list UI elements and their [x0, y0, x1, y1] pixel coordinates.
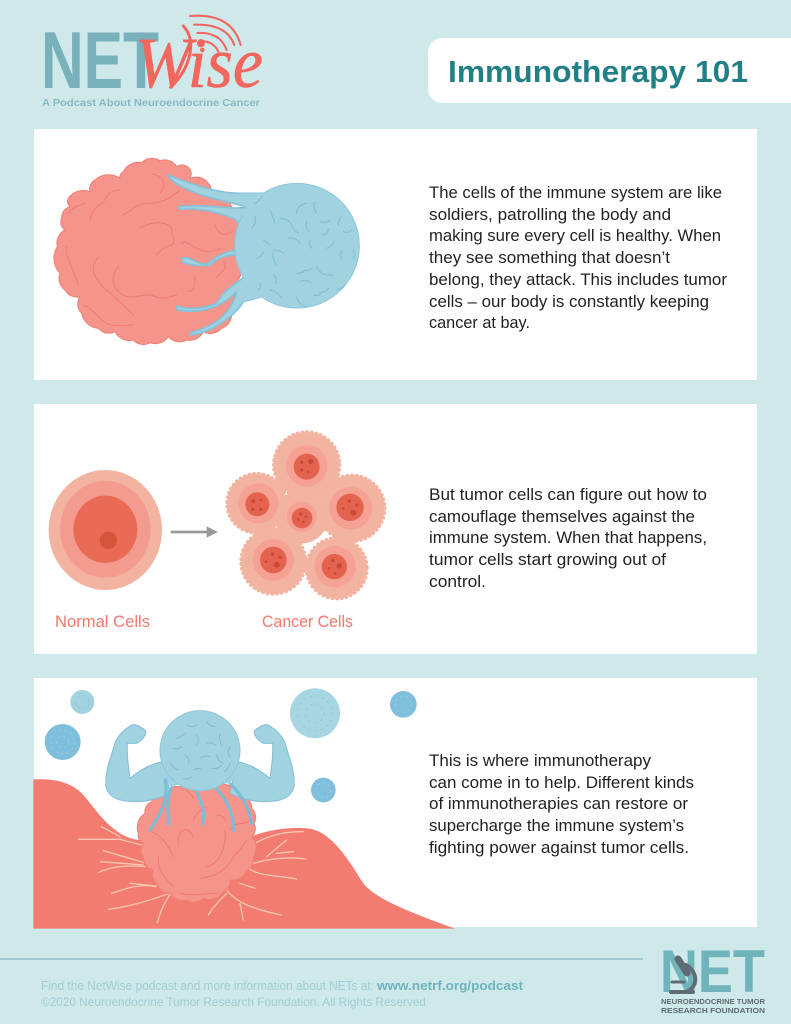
footer: [0, 938, 766, 1015]
logo wordmark NET: NET: [41, 16, 159, 106]
text: immune system soldiers: belong, they attack. This includes tumor: [429, 270, 727, 289]
logo: NETWise podcast: [41, 16, 263, 109]
text: immune system soldiers: they see something that doesn’t: [429, 248, 670, 267]
logo caption line 2: RESEARCH FOUNDATION: [661, 1006, 765, 1015]
text: immune system soldiers: [429, 183, 727, 332]
immune cell with tendrils: [168, 175, 359, 335]
text: how immunotherapy helps: supercharge the immune system’s: [429, 816, 684, 835]
icon: broadcast signal: [171, 16, 241, 87]
text: immune system soldiers: The cells of the immune system are like: [429, 183, 722, 202]
label: normal cells: Normal Cells: [55, 612, 150, 631]
footer url: www.netrf.org/podcast: [376, 979, 524, 993]
tumor: [137, 784, 256, 902]
text: immune system soldiers: soldiers, patrolling the body and: [429, 205, 671, 224]
tumor wrinkles: [148, 790, 250, 895]
logo: Neuroendocrine Tumor Research Foundation: NET: [660, 938, 765, 1005]
footer link line: Find the NetWise podcast and more information about NETs at:: [41, 979, 374, 993]
panel: immunotherapy supercharges immune cell: [33, 678, 757, 929]
arrow: [171, 526, 218, 538]
logo tagline: A Podcast About Neuroendocrine Cancer: [42, 97, 260, 109]
tumor wrinkles: [66, 174, 232, 326]
text: how immunotherapy helps: This is where immunotherapy: [429, 751, 651, 770]
free immune cells: [45, 688, 417, 802]
illustration: immune cell grabbing tumor cell: [54, 158, 359, 344]
immune cell texture: [170, 722, 230, 779]
text: how immunotherapy helps: [429, 751, 694, 857]
tendrils: [149, 768, 252, 831]
panel: normal versus cancer cells: [34, 404, 757, 654]
icon: microscope: [671, 959, 695, 992]
text: how immunotherapy helps: fighting power against tumor cells.: [429, 838, 689, 857]
illustration: strong immune cell on tumor: [33, 688, 455, 929]
text: tumor camouflage: [429, 485, 707, 591]
copyright: ©2020 Neuroendocrine Tumor Research Foundation. All Rights Reserved: [41, 995, 426, 1009]
tissue veins: [78, 827, 306, 923]
text: immune system soldiers: cells – our body is constantly keeping: [429, 292, 709, 311]
immune cell surface texture: [252, 197, 354, 307]
illustration: cell comparison: [49, 432, 384, 598]
text: immune system soldiers: cancer at bay.: [429, 313, 530, 332]
cancer cell cluster: [227, 432, 384, 598]
text: how immunotherapy helps: of immunotherapies can restore or: [429, 794, 688, 813]
logo caption line 1: NEUROENDOCRINE TUMOR: [661, 997, 766, 1006]
tumor cell: [54, 158, 245, 344]
flexed arms: [106, 725, 294, 802]
label: cancer cells: Cancer Cells: [262, 612, 353, 631]
text: tumor camouflage: But tumor cells can figure out how to: [429, 485, 707, 504]
left arm: [106, 725, 170, 802]
text: tumor camouflage: control.: [429, 572, 486, 591]
tissue mound: [33, 779, 455, 929]
text: tumor camouflage: immune system. When that happens,: [429, 528, 707, 547]
logo wordmark Wise: Wise: [135, 23, 263, 103]
right arm: [230, 725, 294, 802]
title: Immunotherapy 101: [448, 54, 748, 89]
panel: immune cell attacking tumor: [34, 129, 757, 380]
title banner: [428, 38, 791, 103]
text: tumor camouflage: camouflage themselves against the: [429, 507, 695, 526]
text: how immunotherapy helps: can come in to help. Different kinds: [429, 773, 694, 792]
text: tumor camouflage: tumor cells start growing out of: [429, 550, 666, 569]
normal cell: [49, 470, 162, 590]
text: immune system soldiers: making sure every cell is healthy. When: [429, 226, 721, 245]
immune cell body: [160, 711, 240, 791]
